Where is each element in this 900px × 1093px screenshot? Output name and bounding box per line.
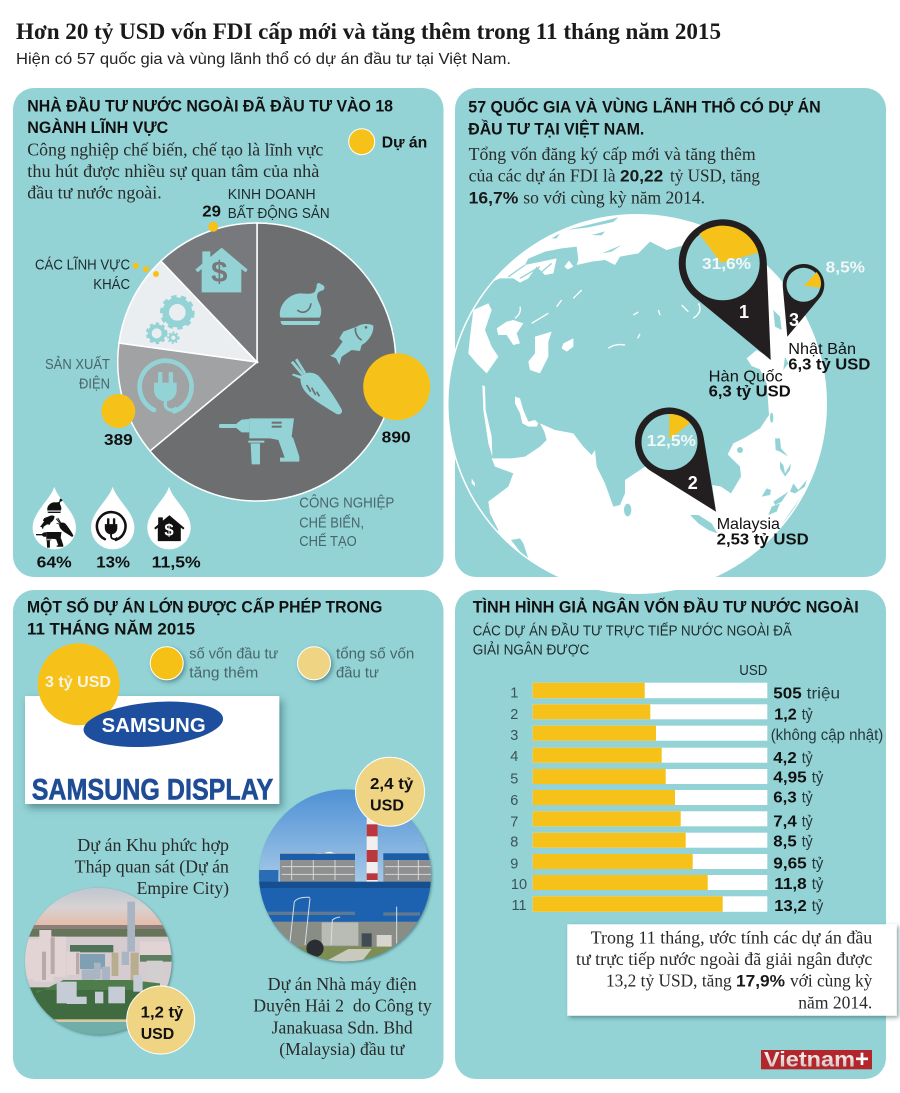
pin: Japan [783, 260, 865, 337]
bar chart: disbursed FDI by period: 9 [510, 856, 518, 872]
icon: manufacturing drop 64%: 64% [37, 555, 72, 572]
legend: added capital: số vốn đầu tư [189, 646, 279, 662]
label: manufacturing [299, 353, 430, 550]
text block: chart subtitle [473, 623, 792, 658]
title: Hơn 20 tỷ USD vốn FDI cấp mới và tăng thêm trong 11 tháng năm 2015 [16, 19, 721, 44]
heading: sectors: NHÀ ĐẦU TƯ NƯỚC NGOÀI ĐÃ ĐẦU TƯ VÀO 18 [27, 96, 393, 116]
panel: investment sectors [13, 88, 444, 577]
label: real estate [202, 187, 330, 232]
bar chart: disbursed FDI by period: 5 [510, 771, 518, 787]
heading: countries: ĐẦU TƯ TẠI VIỆT NAM. [468, 119, 644, 138]
callout: 11-month estimate: với cùng kỳ [790, 971, 873, 991]
callout: 2,4 billion USD [356, 757, 424, 826]
callout: 11-month estimate: 17,9% [736, 973, 785, 991]
label: real estate: KINH DOANH [228, 187, 316, 203]
icon: electricity drop 13% [91, 487, 134, 572]
icon: manufacturing drop 64% [33, 487, 76, 572]
legend: added capital: tăng thêm [189, 665, 258, 681]
text block: Duyen Hai 2: Janakuasa Sdn. Bhd [272, 1017, 413, 1037]
bar chart: disbursed FDI by period: tỷ [812, 770, 824, 787]
legend: total capital: đầu tư [336, 665, 379, 681]
subtitle: Hiện có 57 quốc gia và vùng lãnh thổ có dự án đầu tư tại Việt Nam. [16, 50, 511, 68]
text block: countries intro [469, 144, 760, 207]
text block: sectors intro: Công nghiệp chế biến, chế tạo là lĩnh vực [27, 140, 324, 160]
panel: investor countries [425, 88, 886, 594]
logo card: Samsung Display [25, 643, 279, 806]
panel: disbursement [455, 590, 897, 1079]
label: electricity: 389 [104, 432, 133, 449]
bar chart: disbursed FDI by period: USD [739, 663, 767, 679]
bar chart: disbursed FDI by period: 13,2 [774, 898, 807, 915]
photo: Duyen Hai 2 power plant [255, 785, 435, 967]
text block: Duyen Hai 2: Dự án Nhà máy điện [268, 974, 417, 994]
label: Japan [788, 341, 870, 373]
callout: 11-month estimate: Trong 11 tháng, ước tính các dự án đầu [591, 927, 873, 947]
logo: Vietnam+: Vietnam [764, 1048, 855, 1072]
label: electricity: SẢN XUẤT [45, 356, 110, 373]
bar chart: disbursed FDI by period: 505 [773, 685, 802, 702]
text block: sectors intro: đầu tư nước ngoài. [27, 182, 162, 202]
label: Japan: 6,3 tỷ USD [788, 356, 870, 373]
icon: sector pictograms: $ [211, 256, 227, 289]
text block: Empire City: Empire City) [137, 878, 229, 898]
bar chart: disbursed FDI by period: 1 [510, 686, 518, 702]
panel: large projects [13, 590, 444, 1079]
label: other sectors: CÁC LĨNH VỰC [35, 256, 130, 273]
label: South Korea: 6,3 tỷ USD [709, 384, 791, 401]
pin: South Korea: 31,6% [702, 256, 751, 273]
callout: 1,2 billion USD [127, 986, 195, 1054]
bar chart: disbursed FDI by period: (không cập nhật) [771, 727, 883, 744]
heading: large projects [27, 596, 382, 638]
callout: 1,2 billion USD: USD [141, 1026, 174, 1043]
text block: countries intro: Tổng vốn đăng ký cấp mới và tăng thêm [469, 144, 756, 164]
bar chart: disbursed FDI by period [510, 663, 883, 915]
logo card: Samsung Display: SAMSUNG DISPLAY [32, 773, 273, 806]
bar chart: disbursed FDI by period: tỷ [802, 789, 813, 806]
bar chart: disbursed FDI by period: 10 [511, 877, 527, 893]
bar chart: disbursed FDI by period: 4,95 [773, 770, 807, 787]
icon: real estate drop 11,5% [147, 487, 201, 572]
callout: 3 billion USD [38, 643, 120, 725]
bar chart: disbursed FDI by period: 11,8 [774, 876, 807, 893]
legend: added capital [150, 646, 279, 681]
text block: Empire City: Dự án Khu phức hợp [77, 835, 229, 855]
bar chart: disbursed FDI by period: 9,65 [773, 855, 807, 872]
bar chart: disbursed FDI by period: 6 [510, 793, 518, 809]
globe map [425, 214, 827, 594]
text block: Duyen Hai 2: (Malaysia) đầu tư [279, 1039, 405, 1059]
label: South Korea: Hàn Quốc [709, 369, 783, 386]
bar chart: disbursed FDI by period: tỷ [802, 706, 813, 723]
label: Japan: Nhật Bản [788, 341, 856, 358]
callout: 11-month estimate [567, 924, 897, 1016]
bar chart: disbursed FDI by period: 3 [510, 728, 518, 744]
logo card: Samsung Display: SAMSUNG [102, 715, 206, 737]
logo: Vietnam+ [761, 1046, 872, 1073]
label: other sectors [35, 256, 159, 293]
icon: sector pictograms [140, 248, 373, 464]
text block: Duyen Hai 2: Duyên Hải 2 do Công ty [253, 996, 432, 1016]
label: other sectors: KHÁC [93, 276, 130, 293]
pin: Japan: 8,5% [826, 260, 865, 277]
bar chart: disbursed FDI by period: 7,4 [773, 814, 797, 831]
label: manufacturing: CÔNG NGHIỆP [299, 495, 394, 512]
label: real estate: 29 [202, 204, 221, 221]
bar chart: disbursed FDI by period: tỷ [812, 855, 824, 872]
text block: sectors intro: thu hút được nhiều sự quan tâm của nhà [27, 161, 320, 181]
heading: disbursement: TÌNH HÌNH GIẢ NGÂN VỐN ĐẦU TƯ NƯỚC NGOÀI [473, 597, 859, 617]
text block: countries intro: tỷ USD, tăng [670, 166, 760, 186]
text block: Empire City: Tháp quan sát (Dự án [75, 856, 229, 876]
text block: Empire City [75, 835, 229, 898]
label: electricity: ĐIỆN [79, 375, 110, 392]
bar chart: disbursed FDI by period: 8 [510, 835, 518, 851]
callout: 11-month estimate: năm 2014. [798, 992, 872, 1012]
heading: sectors [27, 96, 393, 137]
callout: 2,4 billion USD: USD [370, 798, 404, 815]
heading: large projects: MỘT SỐ DỰ ÁN LỚN ĐƯỢC CẤP PHÉP TRONG [27, 596, 382, 616]
label: Malaysia: Malaysia [717, 516, 780, 533]
text block: Duyen Hai 2 [253, 974, 432, 1059]
pin: Malaysia [635, 408, 716, 512]
legend: total capital [298, 646, 414, 681]
label: electricity [45, 356, 135, 449]
legend: projects [349, 129, 427, 155]
callout: 11-month estimate: tư trực tiếp nước ngoài đã giải ngân được [576, 949, 873, 969]
bar chart: disbursed FDI by period: tỷ [802, 834, 813, 851]
bar chart: disbursed FDI by period: 8,5 [773, 834, 797, 851]
text block: countries intro: 20,22 [620, 168, 663, 186]
label: Malaysia [717, 516, 809, 548]
legend: total capital: tổng số vốn [336, 646, 414, 662]
pie chart: sectors [118, 223, 396, 501]
legend: projects: Dự án [382, 135, 427, 152]
bar chart: disbursed FDI by period: 2 [510, 707, 518, 723]
label: real estate: BẤT ĐỘNG SẢN [228, 205, 330, 222]
label: manufacturing: 890 [382, 429, 411, 446]
label: Malaysia: 2,53 tỷ USD [717, 531, 809, 548]
callout: 2,4 billion USD: 2,4 tỷ [370, 776, 413, 793]
bar chart: disbursed FDI by period: tỷ [802, 814, 813, 831]
bar chart: disbursed FDI by period: 7 [510, 815, 518, 831]
callout: 3 billion USD: 3 tỷ USD [45, 674, 111, 691]
bar chart: disbursed FDI by period: tỷ [802, 750, 813, 767]
heading: countries [468, 97, 821, 138]
icon: real estate drop 11,5%: 11,5% [152, 555, 201, 572]
text block: sectors intro [27, 140, 324, 202]
pin: Malaysia: 12,5% [647, 433, 696, 450]
icon: real estate drop 11,5%: $ [164, 520, 174, 539]
label: manufacturing: CHẾ TẠO [299, 533, 357, 550]
label: South Korea [709, 369, 791, 401]
heading: countries: 57 QUỐC GIA VÀ VÙNG LÃNH THỔ CÓ DỰ ÁN [468, 97, 821, 117]
callout: 1,2 billion USD: 1,2 tỷ [141, 1004, 183, 1021]
text block: countries intro: 16,7% [469, 189, 519, 207]
callout: 11-month estimate: 13,2 tỷ USD, tăng [606, 971, 732, 991]
bar chart: disbursed FDI by period: tỷ [812, 898, 824, 915]
bar chart: disbursed FDI by period: 11 [511, 898, 527, 914]
text block: countries intro: của các dự án FDI là [469, 166, 616, 186]
icon: electricity drop 13%: 13% [96, 555, 130, 572]
pin: Malaysia: 2 [688, 473, 698, 493]
bar chart: disbursed FDI by period: 4,2 [773, 750, 797, 767]
heading: sectors: NGÀNH LĨNH VỰC [27, 117, 168, 137]
label: manufacturing: CHẾ BIẾN, [299, 514, 364, 531]
pin: South Korea [679, 219, 771, 360]
text block: chart subtitle: CÁC DỰ ÁN ĐẦU TƯ TRỰC TIẾP NƯỚC NGOÀI ĐÃ [473, 623, 792, 640]
pin: Japan: 3 [789, 310, 799, 330]
text block: chart subtitle: GIẢI NGÂN ĐƯỢC [473, 641, 589, 658]
logo: Vietnam+: + [855, 1046, 869, 1073]
text block: countries intro: so với cùng kỳ năm 2014. [523, 187, 705, 207]
bar chart: disbursed FDI by period: 6,3 [773, 789, 797, 806]
heading: large projects: 11 THÁNG NĂM 2015 [27, 619, 195, 638]
bar chart: disbursed FDI by period: 1,2 [774, 706, 797, 723]
bar chart: disbursed FDI by period: triệu [807, 685, 840, 702]
bar chart: disbursed FDI by period: tỷ [812, 876, 824, 893]
bar chart: disbursed FDI by period: 4 [510, 749, 518, 765]
photo: Empire City [24, 888, 174, 1038]
pin: South Korea: 1 [739, 302, 749, 322]
